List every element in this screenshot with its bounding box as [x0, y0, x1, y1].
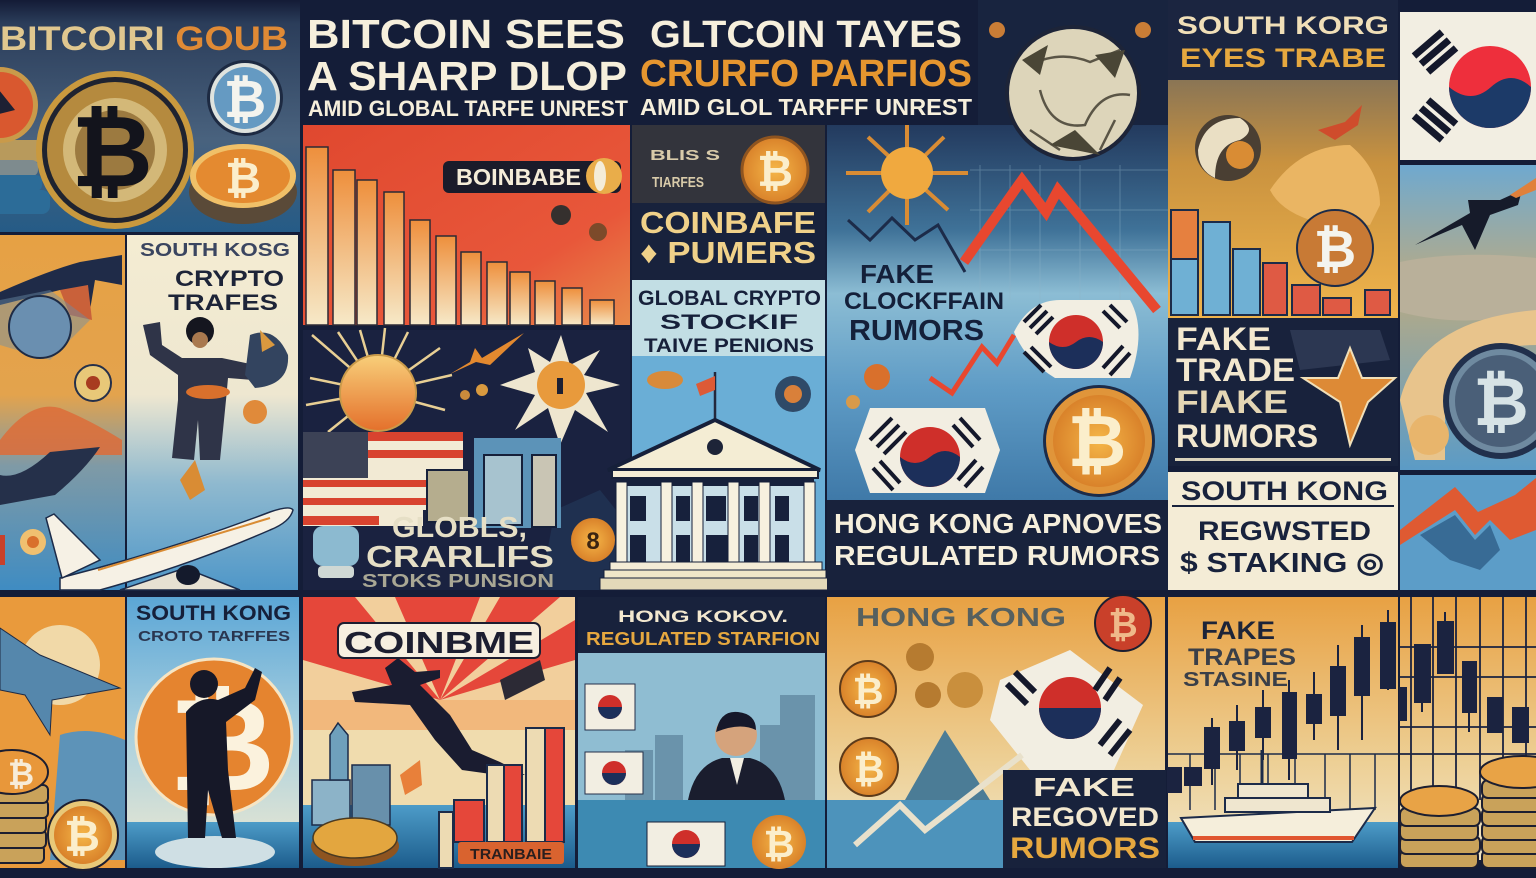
icon: orange coin: ₿ — [225, 154, 261, 203]
panel: fake trade rumors — [1168, 318, 1398, 466]
panel: regulated starfion — [578, 597, 825, 869]
text: FAKE — [1176, 321, 1271, 357]
icon: big gold bitcoin: ₿ — [71, 96, 153, 208]
icon: man — [688, 712, 785, 800]
label: clockfain: CLOCKFFAIN — [844, 288, 1004, 315]
text: TRAPES — [1188, 644, 1296, 671]
icon: coin — [742, 137, 808, 203]
text: REGULATED STARFION — [586, 629, 820, 649]
icon: airplane — [46, 508, 293, 590]
text: GLOBLS, — [392, 512, 527, 544]
icon: coin — [571, 518, 615, 562]
panel: coinbafe pumers — [632, 125, 825, 280]
icon: red bars — [439, 728, 564, 868]
icon: small coin — [75, 365, 111, 401]
icon: coin stack — [0, 750, 48, 863]
icon: orange coin — [189, 144, 297, 224]
label: rumors: RUMORS — [849, 315, 984, 347]
line chart — [848, 218, 965, 272]
icon: us flag — [303, 432, 463, 526]
icon: ship — [1181, 750, 1375, 842]
icon: falling man — [352, 658, 525, 775]
icon: coin: 8 — [586, 528, 600, 555]
label: COINBME — [344, 625, 534, 660]
panel: orange bars with coin — [1168, 80, 1398, 318]
text: SOUTH KONG — [136, 602, 291, 625]
icon: coin — [840, 661, 896, 717]
icon: bolt — [450, 333, 524, 374]
label: fake regoved rumors: FAKE — [1033, 772, 1135, 802]
icon: coin: ₿ — [853, 671, 883, 713]
icon: cracked sphere — [1195, 115, 1261, 181]
icon: coin: ₿ — [1314, 221, 1356, 279]
label: TRANBAIE — [470, 846, 552, 863]
icon: light blue coin — [207, 60, 283, 136]
text: TRAFES — [168, 290, 278, 315]
bars — [1171, 210, 1390, 315]
icon: korean flag — [1014, 300, 1138, 378]
text line 2: EYES TRABE — [1180, 43, 1386, 73]
icon: red coin: ₿ — [1108, 604, 1138, 645]
text: HONG KONG — [856, 602, 1066, 632]
panel: sky behind moon — [978, 0, 1168, 125]
panel: south kong staking — [1168, 472, 1398, 590]
bars — [306, 147, 614, 325]
text: CRYPTO — [175, 266, 284, 291]
panel: global crypto bank building — [600, 280, 830, 590]
icon: buildings — [427, 438, 561, 528]
icon: plane — [0, 628, 120, 735]
heading: ♦ PUMERS — [640, 235, 816, 270]
icon: flag — [585, 752, 643, 794]
candlesticks — [1400, 612, 1528, 742]
label — [458, 842, 564, 864]
panel: main title — [303, 0, 631, 125]
icon: gold coin — [311, 818, 399, 866]
icon: flag — [647, 822, 725, 866]
text line 1: HONG KONG APNOVES — [834, 508, 1162, 539]
icon: coin — [752, 815, 806, 869]
text: TAIVE PENIONS — [644, 336, 814, 357]
text: GLOBAL CRYPTO — [638, 287, 821, 310]
panel: korean flag top right — [1400, 12, 1536, 160]
icon: red coin — [1095, 595, 1151, 651]
icon: big gold bitcoin — [36, 71, 194, 229]
icon: city — [312, 723, 390, 825]
subtitle: AMID GLOL TARFFF UNREST — [640, 94, 972, 120]
panel: coinbme rays — [303, 597, 575, 868]
icon: silhouette — [186, 668, 262, 838]
text: REGWSTED — [1198, 516, 1371, 546]
icon: coin: ₿ — [1473, 364, 1529, 440]
icon: man — [143, 317, 288, 460]
panel: bottom left plane and coins: ₿ — [8, 756, 34, 792]
icon: coin stack — [1400, 756, 1536, 868]
icon: bitcoin coin: ₿ — [1068, 402, 1126, 482]
subtitle: AMID GLOBAL TARFE UNREST — [308, 96, 629, 121]
line — [855, 755, 1022, 845]
label: fake: FAKE — [860, 259, 934, 289]
title line 1: BITCOIN SEES — [307, 11, 625, 57]
panel: south kong man and coin: ₿ — [169, 672, 275, 818]
label: boinbabe: BOINBABE — [456, 164, 581, 190]
text: STOCKIF — [660, 311, 798, 334]
label: fake regoved rumors: RUMORS — [1010, 832, 1160, 865]
icon: coin: ₿ — [64, 812, 100, 861]
text: SOUTH KOSG — [140, 240, 290, 260]
icon: plane silhouette — [1415, 178, 1536, 250]
icon: buildings — [625, 695, 815, 800]
title line 2: A SHARP DLOP — [307, 53, 627, 99]
icon: cracked moon — [1005, 25, 1141, 161]
panel: sun and red line — [827, 22, 1168, 500]
text: STOKS PUNSION — [362, 571, 554, 591]
icon: sun — [846, 125, 968, 225]
text: STASINE — [1183, 669, 1288, 691]
icon: coin — [840, 738, 898, 796]
icon: grey globe — [9, 296, 71, 358]
panel: second title — [632, 0, 980, 125]
label — [338, 623, 540, 660]
icon: coin: ₿ — [764, 824, 794, 866]
label: boinbabe — [443, 158, 622, 194]
icon: whale — [0, 447, 100, 505]
icon: big orange coin — [136, 659, 292, 815]
icon: star — [1303, 348, 1395, 445]
title line 1: GLTCOIN TAYES — [650, 14, 962, 56]
candlesticks — [1168, 610, 1395, 792]
heading: distorted scribble: BITCOIRI GOUB — [0, 20, 288, 58]
sea — [127, 822, 299, 868]
icon: explosion — [500, 335, 620, 445]
label: fake regoved rumors — [1003, 770, 1166, 868]
icon: light blue coin: ₿ — [224, 71, 266, 129]
text: FIAKE — [1176, 384, 1288, 420]
panel: bottom left plane and coins — [0, 597, 125, 870]
icon: bank building — [600, 420, 830, 590]
text: CROTO TARFFES — [138, 628, 290, 645]
icon: blue box — [313, 526, 359, 578]
text line 2: REGULATED RUMORS — [834, 540, 1160, 571]
text: $ STAKING ◎ — [1180, 547, 1384, 578]
text line 1: SOUTH KORG — [1177, 12, 1389, 40]
panel: south kong man and coin — [127, 597, 299, 868]
title line 2: CRURFO PARFIOS — [640, 53, 972, 95]
icon: large korean flag — [990, 650, 1143, 790]
text: TRADE — [1176, 352, 1295, 388]
text: FAKE — [1201, 617, 1275, 645]
icon: coin: ₿ — [757, 147, 793, 196]
panel: plane and coin right — [1400, 165, 1536, 470]
icon: bitcoin coin — [1043, 385, 1155, 497]
small text: BLIS S — [650, 147, 720, 164]
text: CRARLIFS — [366, 539, 554, 574]
small text: TIARFES — [652, 174, 704, 191]
label: fake regoved rumors: REGOVED — [1011, 802, 1159, 832]
panel: left map and whale — [0, 235, 125, 590]
icon: coin stack left — [0, 67, 50, 214]
text: SOUTH KONG — [1181, 476, 1388, 506]
panel: flag and explosion — [303, 328, 632, 591]
icon: coin — [1297, 210, 1373, 286]
panel: south kosg man — [46, 235, 298, 590]
icon: korean flag large — [855, 408, 1000, 493]
icon: flag — [585, 684, 635, 730]
panel: falling bar chart — [303, 125, 630, 325]
panel: top-left bitcoin coins — [0, 0, 300, 232]
icon: sun — [306, 328, 452, 432]
icon: coin — [48, 800, 118, 870]
panel: candlestick and ship — [1168, 597, 1398, 868]
panel: right candles and coins — [1400, 597, 1536, 868]
text: HONG KOKOV. — [618, 607, 788, 626]
icon: coin — [1443, 343, 1536, 459]
panel: hong kong approves — [827, 500, 1168, 590]
icon: coin: ₿ — [854, 749, 884, 791]
panel: hong kong coins and flag — [827, 595, 1166, 868]
text: RUMORS — [1176, 418, 1318, 454]
panel: south korg header — [1168, 0, 1398, 80]
heading: COINBAFE — [640, 205, 816, 240]
panel: red mountains — [1400, 475, 1536, 590]
